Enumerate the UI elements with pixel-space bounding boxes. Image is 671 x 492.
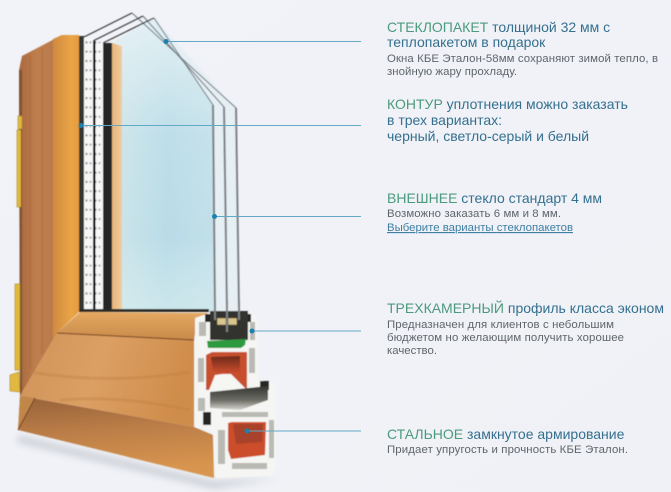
leader: glass unit bbox=[164, 39, 361, 44]
text block: steel reinforcement: СТАЛЬНОЕ замкнутое армирование bbox=[387, 426, 625, 442]
leader lines bbox=[78, 39, 361, 434]
text block: glass unit bbox=[387, 19, 658, 78]
green seal bbox=[207, 339, 246, 348]
text block: three-chamber profile: бюджетом но желающим получить хорошее bbox=[387, 332, 624, 344]
chamber walls bbox=[198, 322, 274, 469]
rubber gaskets bbox=[203, 314, 269, 425]
leader: three-chamber profile bbox=[250, 328, 361, 334]
text block: glass unit: Окна КБЕ Эталон-58мм сохраняют зимой тепло, в bbox=[387, 53, 658, 65]
PVC profile cross-section bbox=[195, 300, 276, 478]
wood front rail bbox=[20, 333, 194, 427]
leader: steel reinforcement bbox=[244, 428, 361, 434]
glazing bead block bbox=[210, 311, 248, 340]
text block: outer glass: ВНЕШНЕЕ стекло стандарт 4 мм bbox=[387, 190, 602, 206]
text block: three-chamber profile bbox=[387, 299, 664, 357]
glass clips bbox=[217, 318, 237, 325]
leader: outer glass bbox=[212, 214, 361, 219]
text block: three-chamber profile: Предназначен для клиентов с небольшим bbox=[387, 319, 614, 331]
lower steel reinforcement bbox=[228, 422, 266, 459]
white sash step bbox=[214, 376, 240, 395]
wood sill bbox=[57, 312, 209, 340]
window corner illustration bbox=[10, 13, 276, 478]
text block: glass unit: теплопакетом в подарок bbox=[387, 34, 546, 50]
glass panel bbox=[111, 18, 239, 312]
spacers and seal bbox=[79, 36, 209, 312]
text block: steel reinforcement bbox=[387, 426, 628, 456]
text block: seal contour: КОНТУР уплотнения можно заказать bbox=[387, 96, 628, 112]
hinge hardware bbox=[10, 116, 22, 392]
text block: outer glass bbox=[387, 190, 602, 234]
text block: glass unit: знойную жару прохладу. bbox=[387, 66, 517, 78]
text block: glass unit: СТЕКЛОПАКЕТ толщиной 32 мм с bbox=[387, 19, 610, 35]
profile white body bbox=[195, 311, 276, 478]
text block: outer glass: Выберите варианты стеклопакетов bbox=[387, 222, 573, 234]
text block: outer glass: Возможно заказать 6 мм и 8 мм. bbox=[387, 208, 561, 220]
dark channel bbox=[210, 386, 268, 410]
leader: seal contour bbox=[78, 123, 361, 128]
text block: seal contour: черный, светло-серый и белый bbox=[387, 128, 589, 144]
wood underside bbox=[18, 396, 214, 478]
shadow under the frame bbox=[18, 436, 278, 488]
glass panes bbox=[84, 13, 239, 312]
upper steel reinforcement bbox=[206, 352, 247, 390]
outer wood vertical frame bbox=[19, 35, 79, 396]
text block: steel reinforcement: Придает упругость и прочность КБЕ Эталон. bbox=[387, 444, 628, 456]
text block: seal contour bbox=[387, 96, 628, 144]
inner wood reveal bbox=[112, 43, 122, 309]
text block: seal contour: в трех вариантах: bbox=[387, 112, 502, 128]
text block: three-chamber profile: качество. bbox=[387, 345, 437, 357]
panes in profile bbox=[214, 300, 240, 332]
text block: three-chamber profile: ТРЕХКАМЕРНЫЙ профиль класса эконом bbox=[387, 299, 664, 316]
